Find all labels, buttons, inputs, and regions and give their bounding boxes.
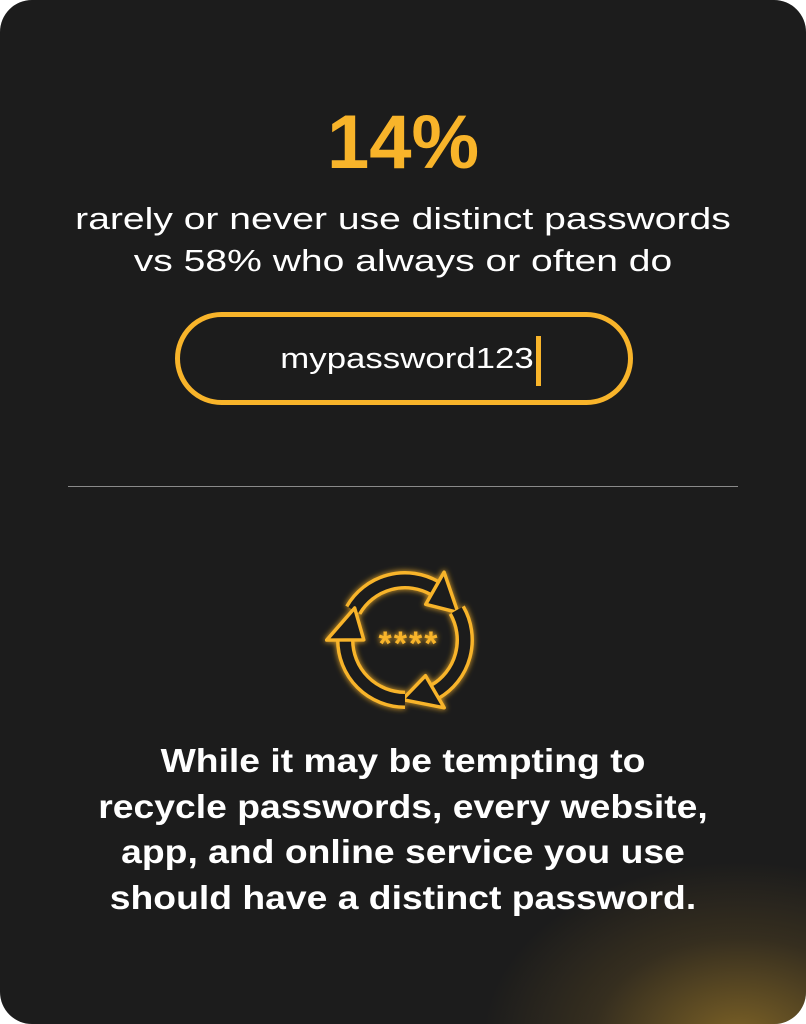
headline stat: 14%: [327, 100, 479, 185]
password field: [175, 312, 633, 405]
body text: recycle passwords, every website,: [98, 788, 708, 824]
subtitle: [75, 201, 731, 278]
body text: should have a distinct password.: [110, 878, 696, 916]
password text: mypassword123: [280, 343, 534, 375]
body text: While it may be tempting to: [161, 742, 645, 779]
subtitle: rarely or never use distinct passwords: [75, 201, 731, 236]
subtitle: vs 58% who always or often do: [134, 243, 672, 278]
cursor: [536, 336, 541, 386]
icon: recycle password: ****: [379, 625, 439, 663]
body text: [98, 742, 708, 916]
body text: app, and online service you use: [121, 833, 685, 870]
